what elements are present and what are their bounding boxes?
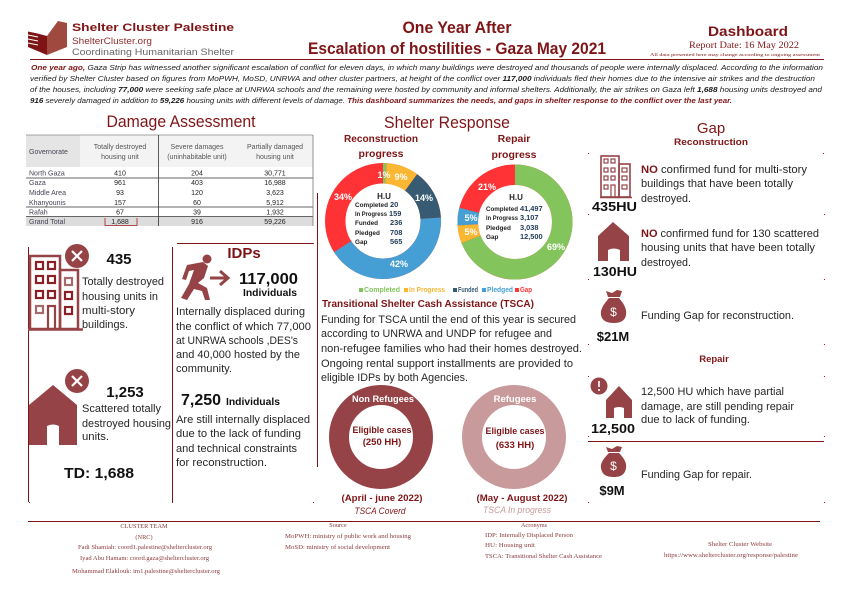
gap item: repair funding: $9M: [599, 483, 625, 498]
chart: non refugees ring: [339, 394, 423, 516]
chart: reconstruction progress donut: Pledged: [355, 230, 380, 237]
chart legend: [359, 287, 532, 294]
intro text block: [30, 63, 823, 105]
chart: reconstruction progress donut: 9%: [394, 172, 408, 182]
panel: TSCA text: eligible IDPs by both Agencies.: [321, 372, 468, 384]
footer: cluster team: Fadi Shamiah: coord1.palestine@sheltercluster.org: [78, 544, 213, 551]
panel: IDPs: 7,250: [181, 392, 221, 409]
chart: reconstruction progress donut: Funded: [355, 220, 378, 227]
table: damage assessment by governorate: 30,771: [264, 170, 286, 178]
panel: TSCA text: Ongoing rental support installments are provided to: [321, 358, 573, 370]
icon: house: [598, 222, 629, 261]
title: [308, 19, 606, 58]
footer: acronyms: TSCA: Transitional Shelter Cash Assistance: [485, 553, 602, 560]
panel: scattered destroyed housing: units.: [82, 431, 109, 443]
footer: cluster team: [72, 523, 221, 575]
chart: repair progress donut: 41,497: [520, 204, 543, 213]
chart: non refugees ring: Non Refugees: [352, 394, 414, 405]
panel: IDPs: at UNRWA schools ,DES's: [176, 335, 298, 347]
table: damage assessment by governorate: 93: [116, 190, 124, 197]
table: damage assessment by governorate: 916: [191, 219, 203, 226]
gap item: repair funding: Funding Gap for repair.: [641, 469, 752, 481]
chart: refugees ring: [472, 394, 568, 515]
gap item: reconstruction funding: Funding Gap for reconstruction.: [641, 310, 794, 322]
table: damage assessment by governorate: 16,988: [264, 180, 286, 187]
panel: IDPs: and 40,000 hosted by the: [176, 349, 300, 361]
table: damage assessment by governorate: 204: [191, 170, 203, 178]
chart: repair progress donut: 69%: [547, 242, 565, 252]
title: Escalation of hostilities - Gaza May 2021: [308, 40, 606, 58]
gap item: scattered housing: destroyed.: [641, 257, 691, 269]
table: damage assessment by governorate: Governorate: [29, 149, 68, 156]
chart: reconstruction progress donut: 20: [390, 200, 398, 209]
gap item: reconstruction funding: [597, 290, 794, 344]
dashboard label and report date: Report Date: 16 May 2022: [689, 40, 799, 50]
heading: repair: Repair: [699, 354, 729, 365]
footer: cluster team: CLUSTER TEAM: [120, 523, 168, 530]
gap item: multi-story buildings: destroyed.: [641, 193, 691, 205]
panel: IDPs: due to the lack of funding: [176, 428, 301, 440]
table: damage assessment by governorate: housing unit: [101, 154, 139, 161]
table: damage assessment by governorate: 67: [116, 210, 124, 216]
header: organisation logo and name: Coordinating Humanitarian Shelter: [72, 47, 234, 57]
chart: reconstruction progress donut: Completed: [355, 202, 388, 209]
footer: sources: MoSD: ministry of social development: [285, 544, 390, 551]
chart: repair progress donut: 3,038: [520, 223, 538, 232]
chart: reconstruction progress donut: In Progress: [355, 211, 387, 218]
icon: multi-story building destroyed: [28, 244, 89, 330]
table: damage assessment by governorate: 120: [191, 190, 203, 197]
dashboard label and report date: Dashboard: [708, 23, 788, 39]
chart: reconstruction progress donut: 565: [390, 237, 402, 246]
panel: scattered destroyed housing: Scattered totally: [82, 403, 162, 415]
panel: totally destroyed housing: Totally destroyed: [82, 276, 164, 288]
footer: cluster team: (NRC): [135, 534, 153, 541]
panel: totally destroyed housing: multi-story: [82, 305, 136, 317]
header: organisation logo and name: [28, 21, 234, 57]
panel: IDPs: for reconstruction.: [176, 457, 267, 469]
footer: sources: MoPWH: ministry of public work and housing: [285, 533, 412, 540]
header: organisation logo and name: ShelterCluster.org: [72, 36, 152, 46]
chart legend: Completed: [364, 287, 400, 294]
panel: IDPs: 117,000: [239, 271, 298, 288]
table: damage assessment by governorate: [26, 135, 313, 226]
icon: money bag: $: [610, 459, 617, 473]
table: damage assessment by governorate: 39: [193, 210, 201, 216]
table: damage assessment by governorate: 5,912: [266, 200, 284, 207]
table: damage assessment by governorate: Partially damaged: [247, 144, 303, 151]
chart: non refugees ring: (250 HH): [363, 437, 401, 448]
footer: acronyms: Acronyms: [521, 522, 548, 529]
chart: reconstruction progress donut: 708: [390, 228, 402, 237]
table: damage assessment by governorate: Khanyounis: [29, 200, 66, 207]
footer: sources: [285, 522, 412, 551]
title: One Year After: [402, 19, 512, 37]
panel: TSCA text: [321, 299, 582, 384]
footer: acronyms: IDP: Internally Displaced Person: [485, 532, 574, 539]
chart: reconstruction progress donut: H.U: [377, 192, 391, 201]
chart: refugees ring: TSCA In progress: [483, 505, 551, 515]
panel: IDPs: [176, 245, 311, 469]
chart: non refugees ring: TSCA Coverd: [354, 506, 406, 516]
icon: building: [600, 156, 632, 198]
panel: scattered destroyed housing: TD: 1,688: [64, 465, 134, 482]
chart: reconstruction progress donut: Reconstruction: [344, 133, 418, 145]
table: damage assessment by governorate: 403: [191, 180, 203, 187]
table: damage assessment by governorate: 1,688: [111, 219, 129, 226]
gap item: multi-story buildings: buildings that have been totally: [641, 178, 793, 190]
intro text block: 916 severely damaged in addition to 59,226 housing units with different levels of damage. This dashboard summarizes the needs, and gaps in shelter response to the conflict over the last year.: [30, 96, 732, 105]
panel: totally destroyed housing: [28, 244, 164, 331]
chart: repair progress donut: [464, 133, 565, 269]
table: damage assessment by governorate: 1,932: [266, 210, 284, 216]
chart: repair progress donut: 12,500: [520, 232, 543, 241]
panel: totally destroyed housing: buildings.: [82, 319, 128, 331]
chart: reconstruction progress donut: 42%: [390, 259, 408, 269]
panel: TSCA text: non-refugee families who had their homes destroyed.: [321, 343, 582, 355]
heading: gap: Reconstruction: [674, 137, 748, 148]
heading: gap: Gap: [697, 120, 725, 137]
table: damage assessment by governorate: housing unit: [256, 154, 294, 161]
chart: refugees ring: (May - August 2022): [476, 493, 568, 504]
icon: house destroyed: [29, 369, 89, 445]
gap item: scattered housing: [593, 222, 819, 279]
footer: acronyms: [485, 522, 602, 560]
icon: shelter cluster logo: [28, 21, 67, 55]
chart: repair progress donut: progress: [492, 149, 537, 161]
gap item: multi-story buildings: [592, 156, 808, 214]
chart: refugees ring: (633 HH): [496, 440, 534, 451]
panel: IDPs: Individuals: [243, 288, 297, 299]
table: damage assessment by governorate: Gaza: [29, 180, 46, 187]
footer: cluster team: Iyad Abu Hamam: coord.gaza@sheltercluster.org: [80, 555, 210, 562]
gap item: partial damage repair: 12,500: [591, 421, 635, 436]
dashboard label and report date: [650, 23, 821, 57]
intro text block: of the houses, including 77,000 were seeking safe place at UNRWA schools and the remaining were hosted by community and informal shelters. Additionally, the air strikes on Gaza left 1,688 housing units destroyed and: [30, 85, 823, 94]
chart: reconstruction progress donut: 159: [389, 209, 401, 218]
footer: acronyms: HU: Housing unit: [485, 542, 535, 549]
table: damage assessment by governorate: Middle Area: [29, 190, 66, 197]
chart: reconstruction progress donut: progress: [359, 148, 404, 160]
footer: website: https://www.sheltercluster.org/response/palestine: [664, 552, 798, 559]
chart: reconstruction progress donut: 236: [390, 218, 402, 227]
table: damage assessment by governorate: 961: [114, 180, 126, 187]
chart: refugees ring: Refugees: [494, 394, 536, 405]
gap item: multi-story buildings: NO confirmed fund for multi-story: [641, 164, 808, 176]
chart: non refugees ring: (April - june 2022): [342, 493, 422, 504]
chart: reconstruction progress donut: [334, 133, 433, 269]
heading: gap: [674, 120, 748, 148]
footer: sources: Source: [329, 522, 347, 529]
footer: website: Shelter Cluster Website: [708, 541, 772, 548]
chart: repair progress donut: Repair: [498, 133, 530, 145]
panel: IDPs: IDPs: [227, 245, 261, 262]
panel: TSCA text: according to UNRWA and UNDP for refugee and: [321, 328, 552, 340]
chart: repair progress donut: 21%: [478, 182, 496, 192]
gap item: scattered housing: 130HU: [593, 264, 637, 279]
panel: IDPs: community.: [176, 363, 232, 375]
panel: IDPs: the conflict of which 77,000: [176, 321, 311, 333]
chart legend: In Progress: [409, 287, 445, 294]
gap item: partial damage repair: damage, are still pending repair: [641, 401, 794, 413]
header: organisation logo and name: Shelter Cluster Palestine: [72, 22, 234, 34]
chart: refugees ring: Eligible cases: [486, 426, 544, 437]
table: damage assessment by governorate: 59,226: [264, 219, 286, 226]
chart: repair progress donut: Completed: [486, 206, 518, 213]
intro text block: One year ago, Gaza Strip has witnessed another significant escalation of conflict for eleven days, in which many buildings were destroyed and thousands of people were internally displaced. According to the information: [31, 63, 823, 72]
icon: money bag: [601, 446, 626, 477]
chart: repair progress donut: H.U: [509, 193, 523, 202]
panel: totally destroyed housing: 435: [106, 251, 132, 268]
gap item: partial damage repair: due to lack of funding.: [641, 414, 750, 426]
gap item: scattered housing: NO confirmed fund for 130 scattered: [641, 228, 819, 240]
chart: reconstruction progress donut: 1%: [377, 170, 391, 180]
table: damage assessment by governorate: 410: [114, 170, 126, 178]
table: damage assessment by governorate: North Gaza: [29, 170, 65, 178]
heading: shelter response: Shelter Response: [384, 114, 510, 132]
heading: damage assessment: Damage Assessment: [106, 112, 256, 131]
gap item: multi-story buildings: 435HU: [592, 199, 637, 214]
chart: repair progress donut: In Progress: [486, 215, 518, 222]
chart legend: Gap: [520, 287, 532, 294]
chart: repair progress donut: 5%: [464, 227, 478, 237]
chart legend: Funded: [458, 287, 478, 294]
panel: IDPs: Are still internally displaced: [176, 414, 310, 426]
chart: repair progress donut: 5%: [464, 213, 478, 223]
chart: non refugees ring: Eligible cases: [352, 425, 412, 436]
panel: scattered destroyed housing: 1,253: [106, 384, 144, 401]
table: damage assessment by governorate: Totally destroyed: [94, 144, 146, 151]
table: damage assessment by governorate: 157: [114, 200, 126, 207]
panel: totally destroyed housing: housing units in: [82, 291, 158, 303]
chart: reconstruction progress donut: 34%: [334, 192, 352, 202]
icon: money bag: [601, 290, 626, 323]
panel: scattered destroyed housing: [29, 369, 171, 482]
table: damage assessment by governorate: 60: [193, 200, 201, 207]
gap item: repair funding: [599, 446, 752, 498]
chart legend: Pledged: [487, 287, 513, 294]
gap item: scattered housing: housing units that have been totally: [641, 242, 815, 254]
intro text block: verified by Shelter Cluster based on figures from MoPWH, MoSD, UNRWA and other cluster partners, at height of the conflict over 117,000 individuals fled their homes due to the intensive air strikes and the destruction: [30, 74, 815, 83]
chart: reconstruction progress donut: Gap: [355, 239, 368, 246]
panel: scattered destroyed housing: destroyed housing: [82, 418, 171, 430]
chart: repair progress donut: Pledged: [486, 225, 511, 232]
icon: damaged house with alert: [590, 378, 632, 418]
gap item: reconstruction funding: $21M: [597, 329, 629, 344]
panel: IDPs: Individuals: [226, 397, 280, 408]
gap item: partial damage repair: [590, 378, 794, 436]
icon: money bag: $: [610, 305, 617, 319]
table: damage assessment by governorate: Grand Total: [29, 219, 66, 226]
panel: IDPs: and technical constraints: [176, 443, 297, 455]
table: damage assessment by governorate: (uninhabitable unit): [167, 154, 227, 161]
table: damage assessment by governorate: Rafah: [29, 210, 48, 216]
panel: TSCA text: Funding for TSCA until the end of this year is secured: [321, 314, 576, 326]
icon: person moving with arrow: [181, 254, 228, 300]
chart: repair progress donut: 3,107: [520, 213, 538, 222]
panel: IDPs: Internally displaced during: [176, 306, 305, 318]
chart: reconstruction progress donut: 14%: [415, 193, 433, 203]
footer: website: [664, 541, 798, 559]
dashboard label and report date: All data presented here may change according to ongoing assessment: [650, 52, 821, 57]
footer: cluster team: Mohammad Elaklouk: im1.palestine@sheltercluster.org: [72, 568, 221, 575]
table: damage assessment by governorate: 3,623: [266, 190, 284, 197]
gap item: partial damage repair: 12,500 HU which have partial: [641, 386, 784, 398]
panel: TSCA text: Transitional Shelter Cash Assistance (TSCA): [322, 299, 534, 310]
chart: repair progress donut: Gap: [486, 234, 499, 241]
table: damage assessment by governorate: Severe damages: [171, 144, 224, 151]
